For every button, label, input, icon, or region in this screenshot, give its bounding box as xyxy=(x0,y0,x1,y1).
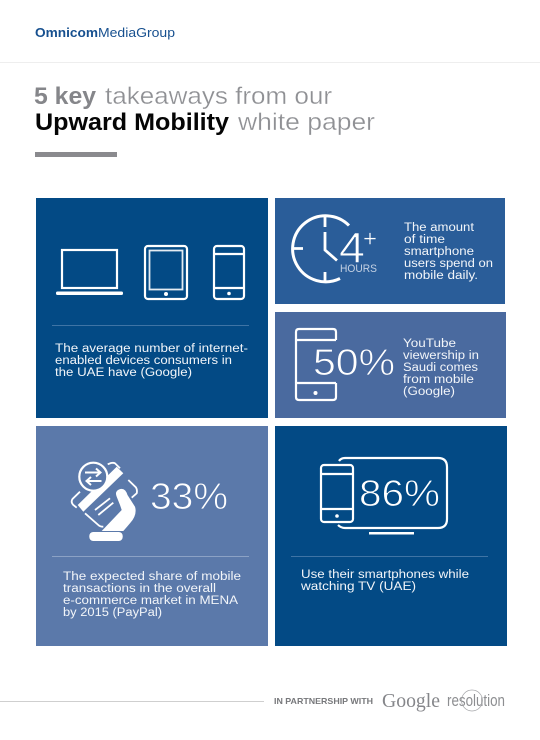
panel: YouTube 50% xyxy=(275,312,506,418)
transactions description xyxy=(63,571,241,619)
stat: 33%: 33% xyxy=(150,476,228,517)
logo: Omnicom Media Group: MediaGroup xyxy=(98,25,175,40)
YouTube description: (Google) xyxy=(403,386,455,398)
YouTube description: Saudi comes xyxy=(403,362,478,374)
icon: phone outline xyxy=(296,329,336,400)
icon: clock xyxy=(293,216,349,283)
footer: partnership credits xyxy=(274,690,505,712)
devices description xyxy=(55,343,248,379)
YouTube description: viewership in xyxy=(403,350,479,362)
TV description: watching TV (UAE) xyxy=(300,581,416,593)
four hours description: The amount xyxy=(404,222,475,234)
four hours description: of time xyxy=(404,234,445,246)
icon: smartphone xyxy=(214,246,244,299)
title xyxy=(34,83,375,136)
title accent bar xyxy=(35,152,117,157)
title: Upward Mobility xyxy=(35,109,230,136)
four hours description: smartphone xyxy=(404,246,474,258)
transactions description: by 2015 (PayPal) xyxy=(63,607,162,619)
four hours description: mobile daily. xyxy=(404,270,478,282)
YouTube description: YouTube xyxy=(403,338,456,350)
icon: credit card and hand xyxy=(72,463,137,541)
footer: partnership credits: IN PARTNERSHIP WITH xyxy=(274,696,373,706)
transactions description: transactions in the overall xyxy=(63,583,216,595)
YouTube description xyxy=(403,338,479,398)
icon: laptop xyxy=(56,250,123,295)
logo: Omnicom Media Group xyxy=(35,25,175,40)
panel: four hours xyxy=(275,198,505,304)
devices description: the UAE have (Google) xyxy=(55,367,192,379)
TV description xyxy=(300,569,469,593)
devices description: The average number of internet- xyxy=(55,343,248,355)
stat: 50%: 50% xyxy=(313,342,395,383)
stat: 4+ hours: 4 xyxy=(339,224,365,273)
panel: smartphone while watching TV 86% xyxy=(275,426,507,646)
transactions description: The expected share of mobile xyxy=(63,571,241,583)
icon: TV and phone xyxy=(321,458,447,534)
logo: Google: Google xyxy=(382,690,440,712)
transactions description: e-commerce market in MENA xyxy=(63,595,238,607)
four hours description: users spend on xyxy=(404,258,493,270)
logo: Omnicom Media Group: Omnicom xyxy=(35,25,98,40)
stat: 86%: 86% xyxy=(359,473,440,514)
panel: mobile transactions 33% xyxy=(36,426,268,646)
stat: 4+ hours xyxy=(339,224,377,275)
icon: tablet xyxy=(145,246,187,299)
YouTube description: from mobile xyxy=(403,374,474,386)
four hours description xyxy=(404,222,493,282)
title: takeaways from our xyxy=(105,83,332,110)
devices description: enabled devices consumers in xyxy=(55,355,232,367)
title: 5 key xyxy=(34,83,97,110)
TV description: Use their smartphones while xyxy=(301,569,469,581)
stat: 4+ hours: HOURS xyxy=(340,263,377,275)
title: white paper xyxy=(237,109,375,136)
stat: 4+ hours: + xyxy=(363,226,377,252)
panel: connected devices xyxy=(36,198,268,418)
logo: resolution: resolution xyxy=(447,691,505,710)
